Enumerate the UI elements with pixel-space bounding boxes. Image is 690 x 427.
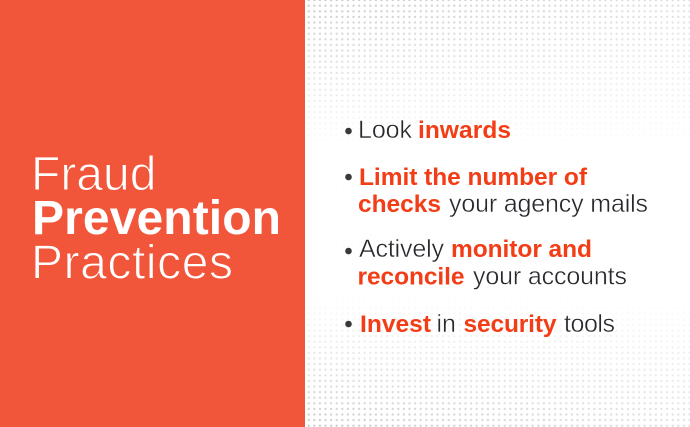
bullet 2: limit checks: checks: [358, 191, 441, 218]
title: Fraud: [31, 148, 156, 201]
bullet list: [345, 116, 648, 338]
bullet 4: invest in security tools: security: [464, 311, 557, 338]
bullet 3: monitor and reconcile: monitor and: [451, 236, 592, 263]
bullet 1: look inwards: [345, 116, 511, 144]
title: [31, 148, 281, 290]
dotted background panel: [305, 0, 690, 427]
bullet 2: limit checks: Limit the number of: [359, 164, 588, 191]
bullet 4: invest in security tools: [345, 310, 615, 338]
bullet 3: monitor and reconcile: Actively: [359, 235, 444, 263]
left orange panel: [0, 0, 305, 427]
bullet 2: limit checks: your agency mails: [449, 190, 648, 218]
bullet 4: invest in security tools: in: [436, 310, 456, 338]
title: Practices: [31, 236, 233, 290]
title: Prevention: [32, 192, 281, 245]
bullet 3: monitor and reconcile: your accounts: [473, 262, 627, 290]
bullet 4: invest in security tools: Invest: [360, 311, 431, 338]
bullet 1: look inwards: inwards: [418, 117, 511, 144]
bullet 3: monitor and reconcile: [345, 235, 627, 290]
bullet 2: limit checks: [345, 164, 648, 218]
bullet 1: look inwards: Look: [358, 116, 412, 144]
bullet 3: monitor and reconcile: reconcile: [358, 264, 464, 290]
bullet 4: invest in security tools: tools: [564, 310, 615, 338]
